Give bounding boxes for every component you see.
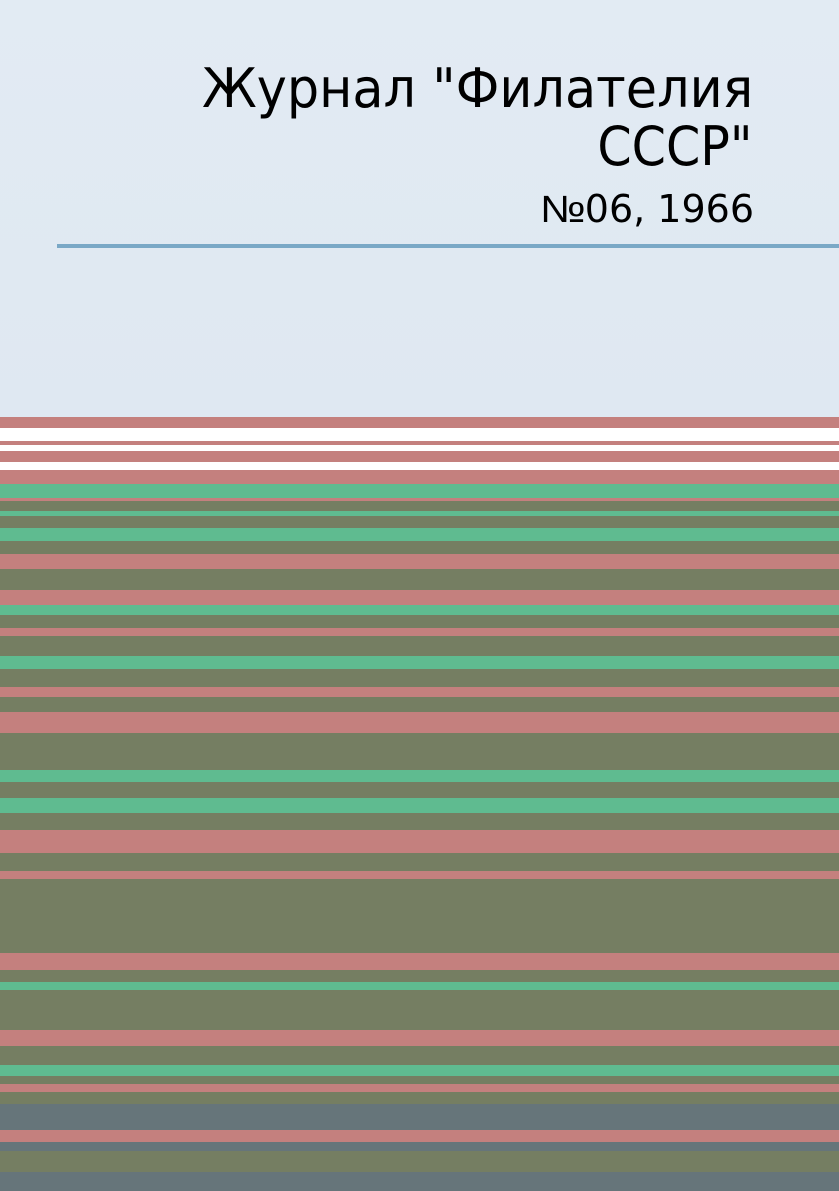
issue number and year: 06, 1966 — [585, 187, 754, 231]
panel: pale blue cover area — [0, 0, 839, 417]
horizontal blue rule — [57, 244, 839, 248]
issue number and year: № — [540, 189, 585, 231]
panel: horizontal colour stripes — [0, 417, 839, 1191]
title: line 2: СССР" — [598, 115, 753, 178]
title: line 1: Журнал "Филателия — [202, 57, 753, 120]
